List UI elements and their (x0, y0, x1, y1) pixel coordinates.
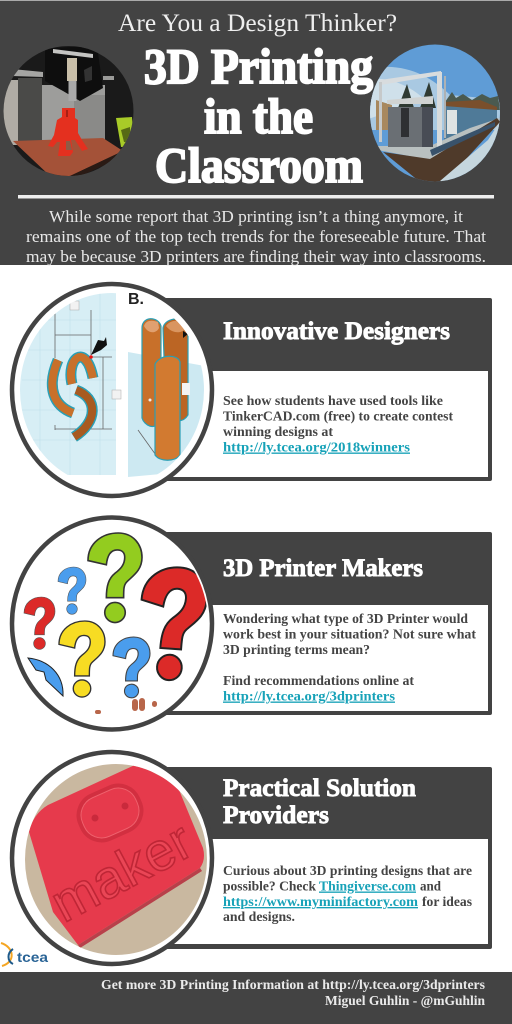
maker text emboss: maker (41, 810, 202, 934)
footer panel (0, 972, 512, 1024)
intro text (26, 207, 486, 266)
body text: for ideas (422, 894, 472, 909)
heading: Practical Solution Providers (223, 775, 416, 829)
body text: Curious about 3D printing designs that are (223, 863, 472, 878)
body text: http://ly.tcea.org/2018winners (223, 440, 410, 454)
heading: Practical Solution Providers: Practical Solution (223, 775, 416, 802)
icon: big red question mark (140, 566, 206, 682)
body text: winning designs at (223, 424, 334, 439)
body text: http://ly.tcea.org/3dprinters (223, 688, 395, 704)
body text: and designs. (223, 909, 295, 924)
icon: green question mark (88, 533, 142, 623)
circle image: TinkerCAD designs (12, 284, 212, 496)
panel: 3D Printer Makers (12, 518, 492, 730)
intro text: While some report that 3D printing isn’t a thing anymore, it (49, 207, 463, 226)
body text: See how students have used tools like (223, 393, 443, 408)
footer text (101, 977, 485, 1008)
circle image: red maker tag (12, 752, 215, 964)
body text: Wondering what type of 3D Printer would (223, 611, 468, 626)
main title: Classroom (155, 137, 363, 193)
icon: small red question mark (24, 597, 55, 649)
body text: 3D printing terms mean? (223, 642, 370, 657)
heading: Practical Solution Providers: Providers (223, 802, 329, 829)
kicker heading: Are You a Design Thinker? (118, 8, 397, 37)
body text: and (420, 878, 441, 894)
logo: tcea (1, 943, 49, 966)
icon: fingers (95, 698, 157, 714)
body text (223, 611, 477, 704)
intro text: may be because 3D printers are finding their way into classrooms. (26, 247, 486, 266)
panel: Practical Solution Providers (12, 752, 492, 964)
footer text: Miguel Guhlin - @mGuhlin (325, 993, 485, 1008)
body text: possible? Check (223, 878, 316, 894)
icon: partial blue shape (28, 658, 63, 696)
footer text: Get more 3D Printing Information at http://ly.tcea.org/3dprinters (101, 977, 485, 992)
intro text: remains one of the top tech trends for the foreseeable future. That (26, 227, 486, 246)
body text: Thingiverse.com (319, 878, 417, 894)
main title: 3D Printing (144, 38, 373, 94)
body text (223, 393, 454, 454)
main title: in the (204, 88, 313, 144)
logo: tcea: tcea (17, 950, 49, 965)
body text: https://www.myminifactory.com (223, 894, 419, 909)
icon: blue question mark (113, 637, 150, 698)
label B: B. (128, 291, 144, 308)
icon: small blue question mark (58, 567, 86, 614)
body text: TinkerCAD.com (free) to create contest (223, 408, 454, 424)
logo emboss (76, 784, 144, 842)
body text: work best in your situation? Not sure what (223, 626, 477, 642)
main title (144, 38, 373, 193)
icon: yellow question mark (59, 621, 105, 697)
heading: Innovative Designers: Innovative Designers (223, 318, 450, 345)
circle image: question marks (12, 518, 212, 730)
header panel (0, 0, 512, 266)
photo: 3D printed house with gantry (370, 44, 500, 182)
body text (223, 863, 472, 924)
body text: Find recommendations online at (223, 673, 415, 688)
photo: 3D printer printing a red tower (4, 46, 134, 176)
heading: 3D Printer Makers: 3D Printer Makers (223, 555, 423, 582)
panel: Innovative Designers (12, 284, 492, 496)
